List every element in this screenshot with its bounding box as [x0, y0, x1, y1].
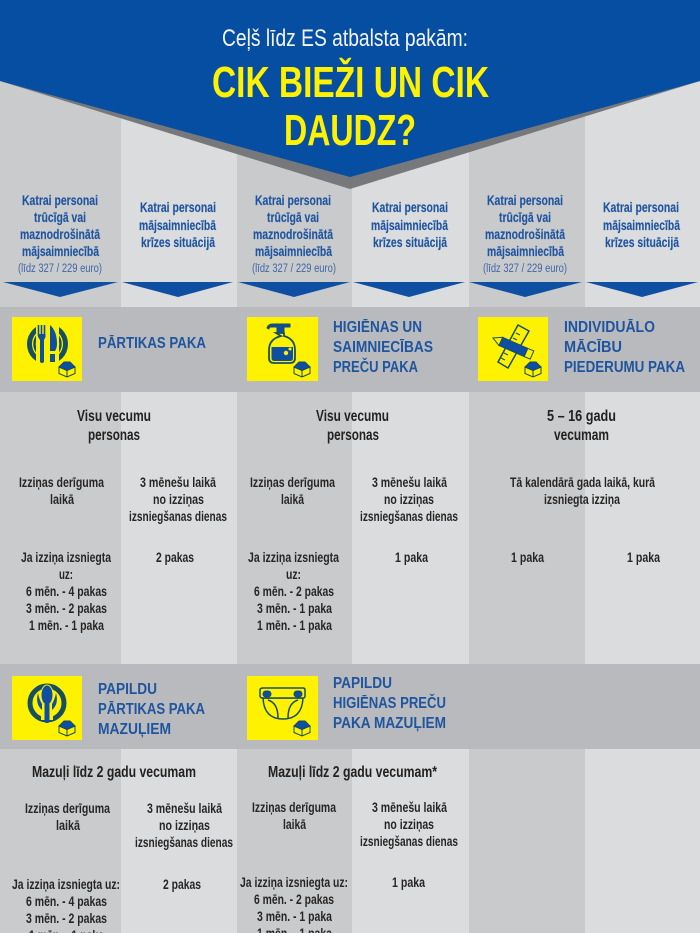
validity: baby food, column 1: Izziņas derīguma	[25, 801, 110, 816]
quantity: hygiene, column 3: Ja izziņa izsniegta	[248, 550, 339, 565]
audience label: column 5: Katrai personai	[487, 192, 563, 208]
heading: school supplies package: INDIVIDUĀLO	[564, 317, 655, 336]
audience group: baby food: Mazuļi līdz 2 gadu vecumam	[32, 764, 196, 781]
title: DAUDZ?	[284, 106, 416, 155]
heading: hygiene package	[333, 317, 433, 376]
validity: hygiene, column 3: laikā	[281, 492, 304, 507]
icon: baby hygiene package	[247, 676, 318, 740]
quantity: school supplies, column 6: 1 paka	[627, 550, 660, 565]
section band 1	[0, 307, 700, 392]
validity: food, column 2: no izziņas	[153, 492, 204, 507]
quantity: food, column 1: uz:	[59, 567, 73, 582]
quantity: baby food, column 1: 3 mēn. - 2 pakas	[26, 911, 107, 926]
audience group: school supplies: 5 – 16 gadu	[547, 408, 616, 425]
audience label: column 6	[603, 199, 680, 250]
validity: food, column 1: laikā	[50, 492, 74, 507]
quantity: hygiene, column 3: 6 mēn. - 2 pakas	[254, 584, 334, 599]
audience group: hygiene	[316, 408, 389, 444]
heading: school supplies package: MĀCĪBU	[564, 337, 622, 356]
heading: baby food package	[98, 681, 205, 738]
validity: baby food, column 2	[135, 801, 233, 850]
quantity: food, column 1: Ja izziņa izsniegta	[21, 550, 111, 565]
header banner	[0, 0, 700, 177]
validity: baby hygiene, column 3: laikā	[283, 817, 306, 832]
audience group: hygiene: personas	[327, 427, 379, 444]
audience label: column 1	[18, 192, 102, 275]
validity: hygiene, column 4: no izziņas	[384, 492, 434, 507]
heading: food package: PĀRTIKAS PAKA	[98, 333, 206, 352]
icon: hygiene package	[247, 317, 318, 381]
heading: baby food package: MAZUĻIEM	[98, 721, 171, 738]
heading: baby food package: PAPILDU	[98, 681, 157, 698]
validity: baby hygiene, column 4: no izziņas	[384, 817, 434, 832]
quantity: baby hygiene, column 4: 1 paka	[392, 875, 425, 890]
audience label: column 3: maznodrošinātā	[253, 226, 333, 242]
arrows pointing down	[3, 282, 698, 297]
audience label: column 1: trūcīgā vai	[34, 209, 86, 225]
quantity: food, column 1: 6 mēn. - 4 pakas	[26, 584, 107, 599]
audience label: column 1: maznodrošinātā	[20, 226, 100, 242]
heading: hygiene package: PREČU PAKA	[333, 357, 418, 376]
audience label: column 5: mājsaimniecībā	[487, 243, 564, 259]
validity: hygiene, column 4: 3 mēnešu laikā	[372, 475, 447, 490]
quantity: baby hygiene, column 3	[240, 875, 348, 933]
quantity: baby food, column 1: 6 mēn. - 4 pakas	[26, 894, 107, 909]
validity: school supplies: izsniegta izziņa	[544, 492, 620, 507]
validity: food, column 1: Izziņas derīguma	[19, 475, 104, 490]
validity: hygiene, column 3	[250, 475, 335, 507]
audience group: food: Visu vecumu	[77, 408, 151, 425]
validity: baby hygiene, column 3	[252, 800, 336, 832]
audience label: column 5: (līdz 327 / 229 euro)	[483, 263, 567, 275]
validity: baby hygiene, column 4: izsniegšanas dienas	[360, 834, 458, 849]
validity: school supplies	[510, 475, 655, 507]
quantity: school supplies, column 5: 1 paka	[511, 550, 544, 565]
banner shadow	[0, 81, 700, 189]
quantity: hygiene, column 3: 1 mēn. - 1 paka	[257, 618, 332, 633]
heading: baby hygiene package: PAPILDU	[333, 675, 392, 692]
audience label: column 4: mājsaimniecībā	[371, 217, 448, 233]
audience group: school supplies	[547, 408, 616, 444]
quantity: baby food, column 1	[12, 877, 120, 933]
validity: hygiene, column 4	[360, 475, 458, 524]
quantity: food, column 1: 3 mēn. - 2 pakas	[26, 601, 107, 616]
heading: school supplies package	[564, 317, 685, 376]
section band 2	[0, 664, 700, 749]
heading: hygiene package: SAIMNIECĪBAS	[333, 337, 433, 356]
validity: baby food, column 1: laikā	[56, 818, 80, 833]
audience label: column 1: mājsaimniecībā	[22, 243, 99, 259]
audience label: column 4: Katrai personai	[372, 199, 448, 215]
audience label: column 4: krīzes situācijā	[373, 234, 447, 250]
icon: school supplies package	[478, 317, 548, 381]
icon: baby food package	[12, 676, 82, 740]
validity: baby hygiene, column 3: Izziņas derīguma	[252, 800, 336, 815]
audience label: column 3: Katrai personai	[255, 192, 331, 208]
audience label: column 3: mājsaimniecībā	[255, 243, 332, 259]
quantity: baby food, column 2: 2 pakas	[163, 877, 201, 892]
quantity: hygiene, column 3: uz:	[286, 567, 301, 582]
validity: hygiene, column 3: Izziņas derīguma	[250, 475, 335, 490]
quantity: food, column 1: 1 mēn. - 1 paka	[29, 618, 104, 633]
quantity: food, column 2: 2 pakas	[156, 550, 194, 565]
quantity: baby hygiene, column 3: 3 mēn. - 1 paka	[257, 909, 332, 924]
validity: baby hygiene, column 4: 3 mēnešu laikā	[372, 800, 447, 815]
title	[212, 57, 489, 155]
quantity: baby food, column 1: Ja izziņa izsniegta uz:	[12, 877, 120, 892]
audience group: baby hygiene: Mazuļi līdz 2 gadu vecumam*	[268, 764, 438, 781]
validity: hygiene, column 4: izsniegšanas dienas	[360, 509, 458, 524]
heading: baby hygiene package: PAKA MAZUĻIEM	[333, 715, 446, 732]
quantity: hygiene, column 3	[248, 550, 339, 633]
validity: baby food, column 2: 3 mēnešu laikā	[147, 801, 222, 816]
heading: baby hygiene package: HIGIĒNAS PREČU	[333, 693, 446, 712]
audience group: hygiene: Visu vecumu	[316, 408, 389, 425]
audience label: column 3	[252, 192, 336, 275]
validity: school supplies: Tā kalendārā gada laikā, kurā	[510, 475, 655, 490]
validity: food, column 1	[19, 475, 104, 507]
audience label: column 5: trūcīgā vai	[499, 209, 551, 225]
quantity: food, column 1	[21, 550, 111, 633]
title: CIK BIEŽI UN CIK	[212, 57, 489, 107]
subtitle: Ceļš līdz ES atbalsta pakām:	[222, 25, 468, 52]
audience label: column 3: trūcīgā vai	[267, 209, 319, 225]
validity: food, column 2: 3 mēnešu laikā	[140, 475, 216, 490]
validity: food, column 2: izsniegšanas dienas	[129, 509, 227, 524]
audience label: column 5: maznodrošinātā	[485, 226, 565, 242]
validity: baby food, column 2: no izziņas	[159, 818, 210, 833]
validity: baby food, column 2: izsniegšanas dienas	[135, 835, 233, 850]
quantity: baby hygiene, column 3: 6 mēn. - 2 pakas	[254, 892, 334, 907]
audience label: column 2: krīzes situācijā	[141, 234, 215, 250]
quantity: hygiene, column 4: 1 paka	[395, 550, 428, 565]
heading: baby hygiene package	[333, 675, 446, 732]
validity: food, column 2	[129, 475, 227, 524]
audience label: column 2: Katrai personai	[140, 199, 216, 215]
audience group: school supplies: vecumam	[554, 427, 609, 444]
audience label: column 4	[371, 199, 448, 250]
audience label: column 3: (līdz 327 / 229 euro)	[252, 263, 336, 275]
quantity: baby hygiene, column 3: Ja izziņa izsniegta uz:	[240, 875, 348, 890]
audience label: column 2	[139, 199, 216, 250]
audience label: column 1: (līdz 327 / 229 euro)	[18, 263, 102, 275]
audience label: column 1: Katrai personai	[22, 192, 98, 208]
audience label: column 2: mājsaimniecībā	[139, 217, 216, 233]
heading: hygiene package: HIGIĒNAS UN	[333, 317, 422, 336]
heading: baby food package: PĀRTIKAS PAKA	[98, 699, 205, 718]
audience group: food	[77, 408, 151, 444]
quantity: hygiene, column 3: 3 mēn. - 1 paka	[257, 601, 332, 616]
validity: baby hygiene, column 4	[360, 800, 458, 849]
validity: baby food, column 1	[25, 801, 110, 833]
icon: food package	[12, 317, 82, 381]
audience label: column 5	[483, 192, 567, 275]
audience group: food: personas	[88, 427, 140, 444]
